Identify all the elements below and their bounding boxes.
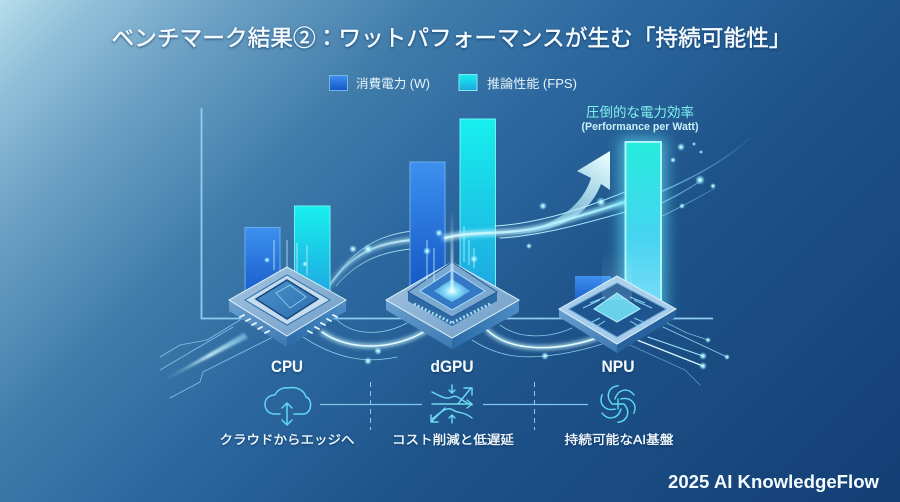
caption: cost and latency: コスト削減と低遅延 [392, 432, 515, 447]
NPU bar glow [620, 138, 666, 318]
bars: dGPU [410, 119, 496, 294]
energy flow curves: dGPU towards NPU [445, 138, 750, 238]
icon: cloud with up-down arrow [265, 387, 311, 425]
NPU power bar [575, 276, 611, 306]
NPU performance bar [626, 142, 661, 312]
sparkle particles [264, 142, 730, 370]
traces: right of NPU [630, 323, 727, 385]
bars: CPU [245, 206, 330, 302]
chip: CPU [229, 267, 346, 347]
chip: NPU [559, 250, 676, 353]
legend: power label: 消費電力 (W) [356, 76, 430, 91]
efficiency label: (Performance per Watt) [582, 121, 699, 133]
legend: performance label: 推論性能 (FPS) [487, 76, 577, 91]
chart axes [202, 108, 713, 318]
caption: sustainable AI: 持続可能なAI基盤 [564, 432, 674, 447]
legend [330, 74, 577, 91]
legend: power swatch [330, 76, 348, 90]
efficiency label [582, 105, 699, 133]
energy flow curve: CPU to dGPU [330, 228, 445, 286]
footer credit: 2025 AI KnowledgeFlow [668, 472, 880, 492]
chip: dGPU [386, 210, 519, 349]
label: NPU: NPU [602, 358, 634, 376]
title: ベンチマーク結果②：ワットパフォーマンスが生む「持続可能性」 [112, 26, 792, 51]
bars: NPU [575, 138, 666, 318]
traces: left of CPU [157, 320, 273, 398]
bottom captions [220, 432, 674, 447]
chip traces [157, 320, 727, 398]
traces: CPU to dGPU [303, 320, 427, 360]
efficiency label: 圧倒的な電力効率 [586, 105, 694, 120]
label: dGPU: dGPU [430, 358, 474, 376]
caption: cloud to edge: クラウドからエッジへ [220, 433, 354, 447]
icon: crossing arrows [431, 385, 472, 423]
processor labels [271, 358, 634, 376]
data lines above chips [274, 226, 474, 282]
label: CPU: CPU [271, 358, 303, 376]
traces: dGPU to NPU [472, 325, 608, 357]
icon: swirl aperture [598, 383, 638, 425]
growth arrow [513, 151, 610, 234]
legend: performance swatch [459, 74, 477, 90]
bottom connector lines [320, 404, 588, 406]
